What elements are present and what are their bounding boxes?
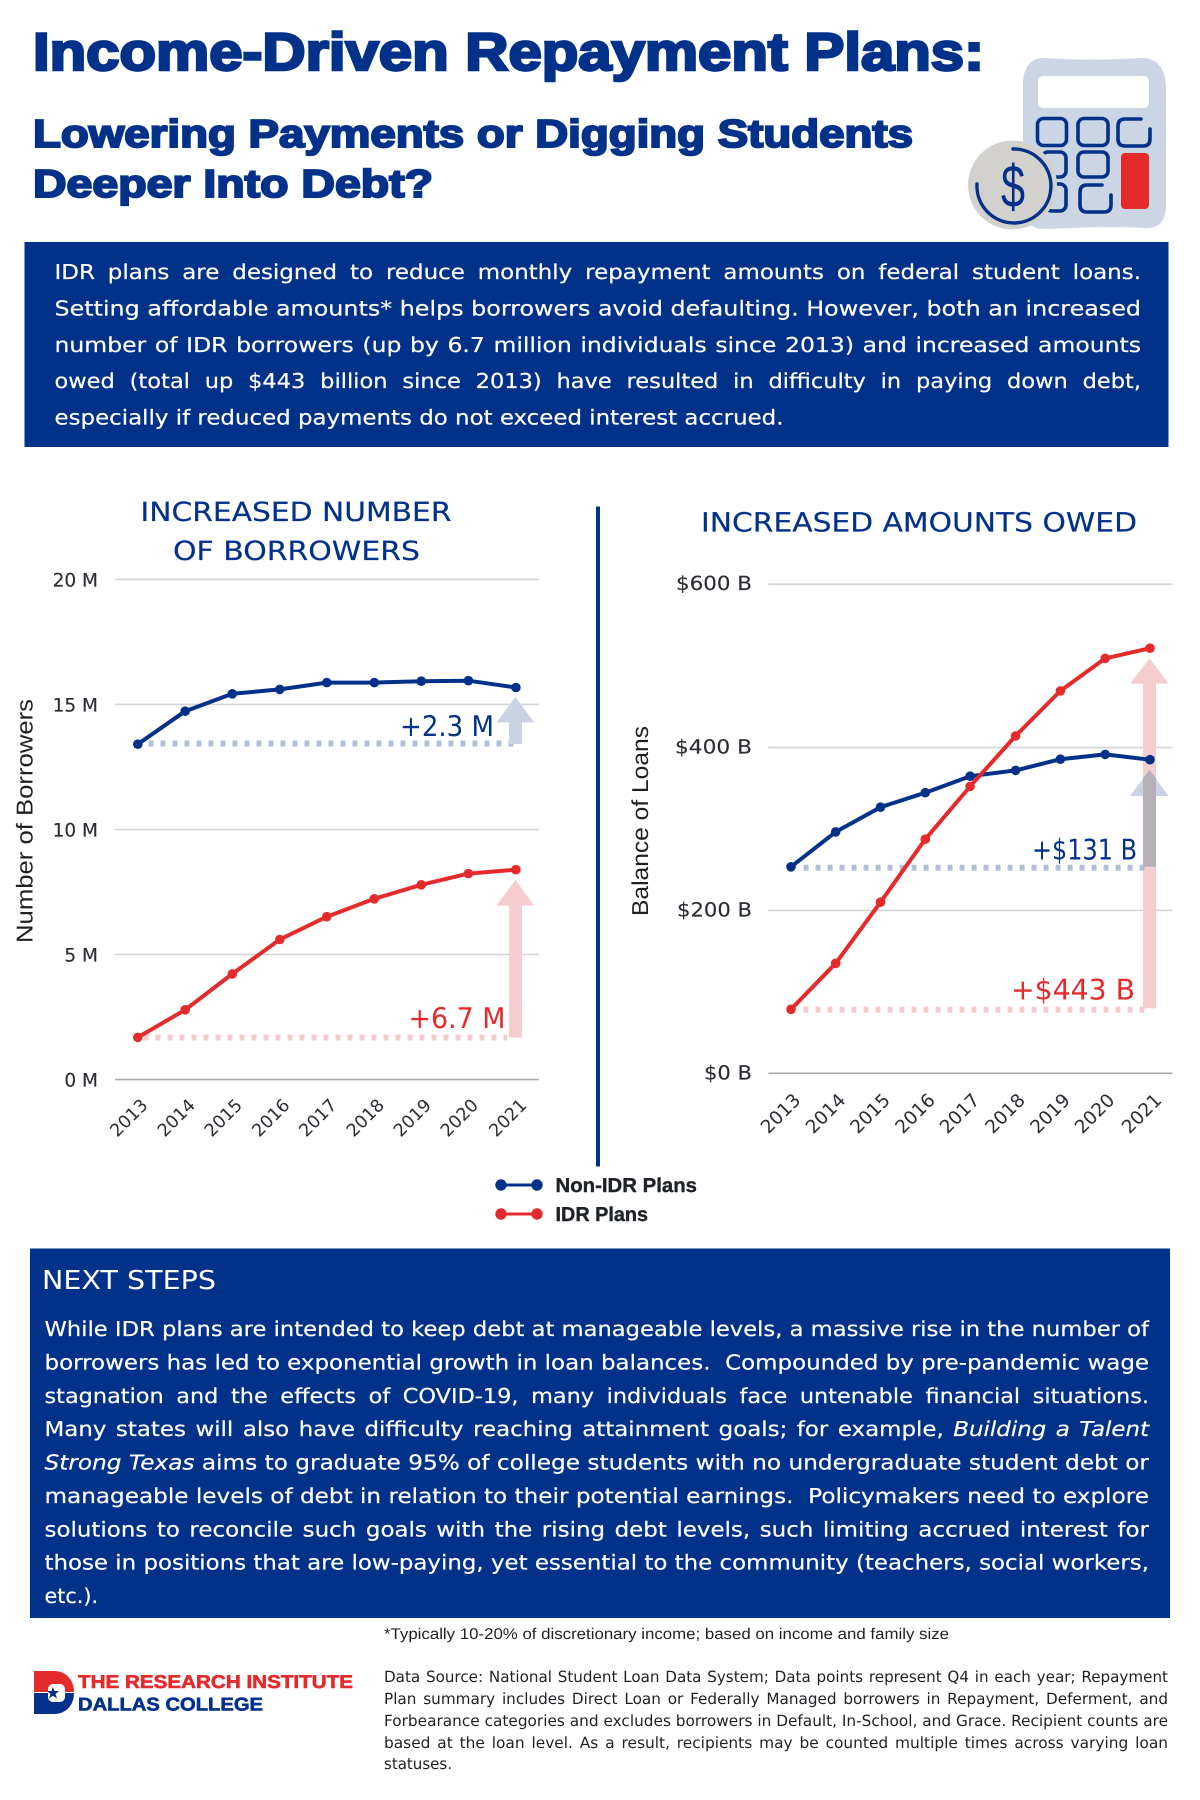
x axis labels: borrowers: 2015 bbox=[201, 1096, 247, 1141]
center divider bbox=[596, 506, 600, 1166]
logo: the research institute dallas college: THE RESEARCH INSTITUTE bbox=[78, 1671, 353, 1692]
panel: introduction: owed (total up $443 billion since 2013) have resulted in difficulty in paying down debt, bbox=[54, 369, 1141, 393]
callout: +6.7 M: +6.7 M bbox=[408, 1002, 506, 1035]
x axis labels: borrowers: 2019 bbox=[390, 1096, 436, 1141]
icon: calculator and dollar coin bbox=[968, 58, 1166, 230]
x axis labels: amounts: 2017 bbox=[936, 1090, 984, 1138]
chart title: amounts owed: INCREASED AMOUNTS OWED bbox=[701, 508, 1137, 538]
text block: data source: Plan summary includes Direct Loan or Federally Managed borrowers in Repayment, Deferment, and bbox=[384, 1690, 1168, 1708]
icon: calculator and dollar coin: $ bbox=[1001, 153, 1025, 220]
chart title: borrowers bbox=[140, 497, 452, 567]
text block: data source: Data Source: National Student Loan Data System; Data points represent Q4 in each year; Repayment bbox=[384, 1668, 1168, 1686]
x axis labels: amounts: 2018 bbox=[982, 1090, 1030, 1138]
callout: +$443 B: +$443 B bbox=[1011, 974, 1135, 1007]
line: IDR balance bbox=[786, 643, 1155, 1014]
panel: introduction: IDR plans are designed to reduce monthly repayment amounts on federal student loans. bbox=[54, 260, 1141, 284]
y axis labels: amounts bbox=[675, 572, 752, 1084]
x axis labels: borrowers bbox=[107, 1096, 531, 1141]
text block: next steps body: stagnation and the effects of COVID-19, many individuals face untenable financial situations. bbox=[44, 1384, 1149, 1408]
x axis labels: borrowers: 2013 bbox=[107, 1096, 152, 1141]
x axis labels: amounts: 2016 bbox=[892, 1090, 940, 1138]
x axis labels: borrowers: 2018 bbox=[343, 1096, 389, 1141]
text block: next steps body: solutions to reconcile such goals with the rising debt levels, such limiting accrued interest for bbox=[44, 1518, 1150, 1542]
x axis labels: amounts: 2015 bbox=[847, 1090, 895, 1138]
text block: next steps body: Many states will also have difficulty reaching attainment goals; for example, Building a Talent bbox=[44, 1417, 1150, 1441]
panel: introduction bbox=[24, 242, 1168, 447]
x axis labels: borrowers: 2021 bbox=[486, 1096, 531, 1141]
callout: +$131 B: +$131 B bbox=[1032, 834, 1137, 866]
logo: the research institute dallas college: DALLAS COLLEGE bbox=[78, 1694, 263, 1715]
x axis labels: amounts: 2019 bbox=[1027, 1090, 1075, 1138]
chart title: borrowers: OF BORROWERS bbox=[173, 536, 420, 567]
panel: introduction: especially if reduced payments do not exceed interest accrued. bbox=[54, 406, 783, 430]
x axis labels: amounts: 2014 bbox=[802, 1090, 850, 1138]
panel: introduction: Setting affordable amounts* helps borrowers avoid defaulting. However, both an increased bbox=[54, 296, 1141, 320]
y axis labels: borrowers: 0 M bbox=[64, 1070, 98, 1092]
arrow: IDR borrower growth bbox=[144, 880, 534, 1038]
panel: introduction: number of IDR borrowers (up by 6.7 million individuals since 2013) and increased amounts bbox=[54, 333, 1141, 357]
text block: data source bbox=[384, 1668, 1168, 1773]
x axis labels: amounts bbox=[757, 1090, 1166, 1138]
y axis labels: amounts: $600 B bbox=[676, 572, 752, 595]
subtitle bbox=[33, 113, 913, 206]
x axis labels: amounts: 2021 bbox=[1118, 1090, 1166, 1138]
x axis labels: borrowers: 2014 bbox=[154, 1096, 200, 1141]
y axis title: number of borrowers: Number of Borrowers bbox=[12, 699, 38, 943]
text block: next steps body: While IDR plans are intended to keep debt at manageable levels, a massive rise in the number of bbox=[44, 1317, 1150, 1341]
text block: next steps body bbox=[44, 1317, 1150, 1608]
text block: data source: based at the loan level. As a result, recipients may be counted multiple times across varying loan bbox=[384, 1734, 1168, 1752]
subtitle: Deeper Into Debt? bbox=[33, 163, 433, 206]
y axis labels: borrowers: 15 M bbox=[53, 696, 98, 716]
text block: data source: Forbearance categories and excludes borrowers in Default, In-School, and Grace. Recipient counts are bbox=[384, 1712, 1168, 1730]
arrow: non-IDR borrower growth bbox=[148, 697, 534, 744]
y axis labels: borrowers bbox=[53, 570, 98, 1092]
x axis labels: borrowers: 2016 bbox=[249, 1096, 294, 1141]
line: IDR borrowers bbox=[133, 865, 521, 1042]
y axis labels: borrowers: 5 M bbox=[64, 946, 98, 966]
footnote: *Typically 10-20% of discretionary income; based on income and family size bbox=[384, 1626, 949, 1643]
text block: next steps body: Strong Texas aims to graduate 95% of college students with no undergraduate student debt or bbox=[44, 1450, 1150, 1474]
line: non-IDR balance bbox=[786, 750, 1155, 872]
text block: next steps body: borrowers has led to exponential growth in loan balances. Compounded by pre-pandemic wage bbox=[44, 1350, 1149, 1374]
logo: the research institute dallas college bbox=[34, 1671, 353, 1715]
arrow: non-IDR balance growth bbox=[804, 770, 1169, 868]
legend bbox=[495, 1175, 697, 1226]
y axis labels: amounts: $0 B bbox=[704, 1062, 752, 1084]
heading: next steps: NEXT STEPS bbox=[42, 1266, 216, 1296]
text block: next steps body: etc.). bbox=[44, 1584, 98, 1608]
callout: +2.3 M: +2.3 M bbox=[400, 710, 494, 743]
y axis title: balance of loans: Balance of Loans bbox=[627, 726, 653, 916]
x axis labels: borrowers: 2020 bbox=[437, 1096, 483, 1141]
panel: increased amounts owed chart bbox=[627, 508, 1172, 1138]
x axis labels: borrowers: 2017 bbox=[296, 1096, 341, 1141]
legend: Non-IDR Plans bbox=[556, 1175, 697, 1197]
y axis labels: borrowers: 10 M bbox=[53, 820, 98, 842]
line: non-IDR borrowers bbox=[133, 676, 521, 749]
y axis labels: borrowers: 20 M bbox=[53, 570, 98, 592]
x axis labels: amounts: 2020 bbox=[1071, 1090, 1119, 1138]
x axis labels: amounts: 2013 bbox=[757, 1090, 805, 1138]
subtitle: Lowering Payments or Digging Students bbox=[33, 113, 913, 156]
legend: IDR Plans bbox=[556, 1204, 648, 1226]
y axis labels: amounts: $200 B bbox=[677, 898, 752, 922]
title: Income-Driven Repayment Plans: bbox=[33, 23, 984, 82]
chart title: borrowers: INCREASED NUMBER bbox=[140, 497, 452, 528]
panel: next steps bbox=[30, 1248, 1170, 1618]
text block: next steps body: those in positions that are low-paying, yet essential to the community (teachers, social workers, bbox=[44, 1550, 1149, 1574]
panel: increased number of borrowers chart bbox=[12, 497, 539, 1141]
arrow: IDR balance growth bbox=[804, 658, 1169, 1010]
y axis labels: amounts: $400 B bbox=[675, 736, 752, 758]
text block: data source: statuses. bbox=[384, 1755, 452, 1773]
text block: next steps body: manageable levels of debt in relation to their potential earnings. Policymakers need to explore bbox=[44, 1484, 1149, 1508]
